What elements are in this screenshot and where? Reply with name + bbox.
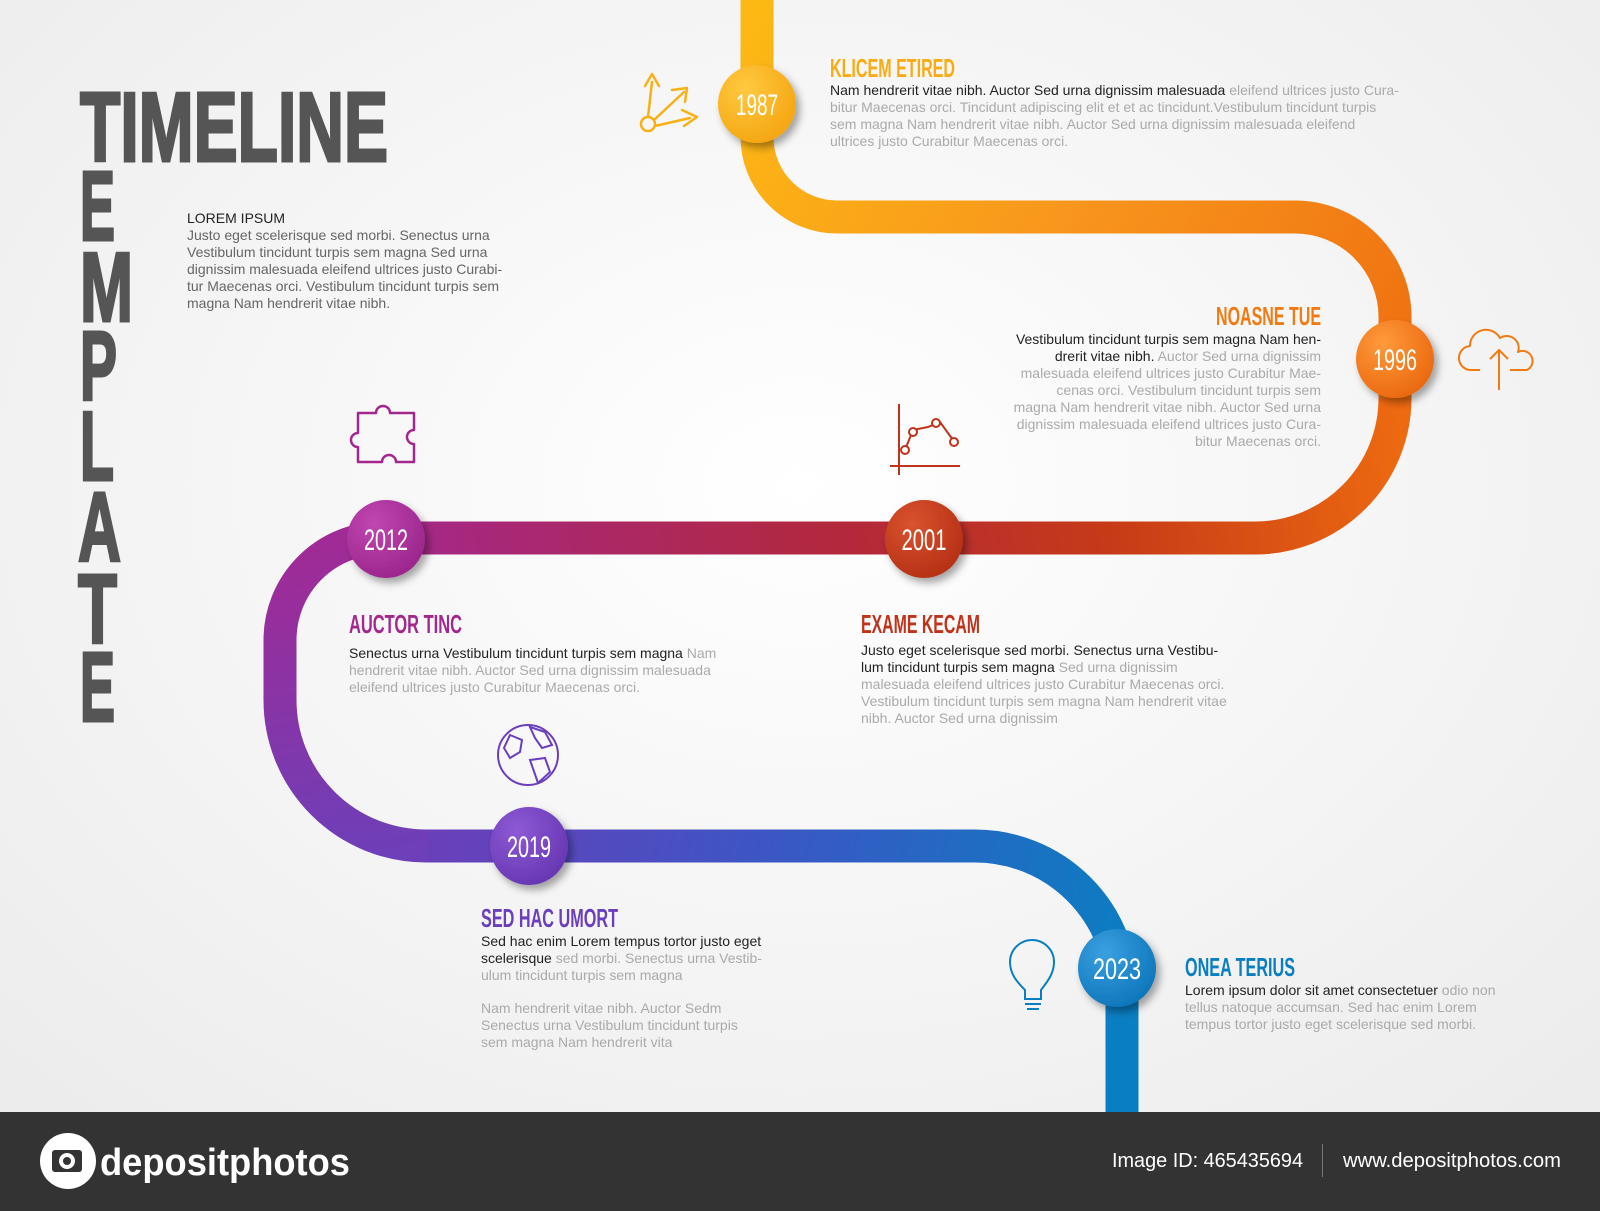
timeline path [280, 0, 1395, 1112]
logo [40, 1133, 350, 1189]
milestone 1996 text: magna Nam hendrerit vitae nibh. Auctor Sed urna [1014, 399, 1321, 415]
milestone 1987 text: Nam hendrerit vitae nibh. Auctor Sed urna dignissim malesuada eleifend ultrices justo Cura- [830, 82, 1399, 98]
icon: puzzle [351, 406, 414, 462]
intro text: Justo eget scelerisque sed morbi. Senectus urna [187, 227, 490, 243]
milestone 2023 text: Lorem ipsum dolor sit amet consectetuer odio non [1185, 982, 1496, 998]
milestone 2012 text: eleifend ultrices justo Curabitur Maecenas orci. [349, 679, 640, 695]
year labels: 2001 [902, 524, 946, 557]
footer info: www.depositphotos.com [1342, 1150, 1561, 1172]
icon: light bulb [1010, 940, 1054, 1009]
milestone 2019 text [481, 903, 762, 1050]
intro text: tur Maecenas orci. Vestibulum tincidunt turpis sem [187, 278, 499, 294]
milestone 1996 text [1014, 301, 1321, 449]
milestone 2001 text: Vestibulum tincidunt turpis sem magna Nam hendrerit vitae [861, 693, 1227, 709]
year labels: 1987 [736, 89, 778, 122]
milestone 1996 text: cenas orci. Vestibulum tincidunt turpis sem [1056, 382, 1321, 398]
footer info: Image ID: 465435694 [1112, 1150, 1303, 1172]
milestone 1987 text: bitur Maecenas orci. Tincidunt adipiscing elit et et ac tincidunt.Vestibulum tincidunt turpis [830, 99, 1376, 115]
milestone 2019 text: ulum tincidunt turpis sem magna [481, 967, 683, 983]
milestone 2023 text: ONEA TERIUS [1185, 952, 1295, 982]
title [78, 72, 388, 742]
milestone 1987 text [830, 53, 1399, 149]
intro text: dignissim malesuada eleifend ultrices justo Curabi- [187, 261, 502, 277]
milestone 2019 text: sem magna Nam hendrerit vita [481, 1034, 673, 1050]
milestone 1987 text: sem magna Nam hendrerit vitae nibh. Auctor Sed urna dignissim malesuada eleifend [830, 116, 1355, 132]
milestone 2012 text: AUCTOR TINC [349, 609, 462, 639]
title: E [80, 151, 115, 261]
icon: cloud upload [1459, 330, 1533, 390]
intro text: LOREM IPSUM [187, 210, 285, 226]
milestone 2001 text [861, 609, 1227, 726]
milestone 1996 text: dignissim malesuada eleifend ultrices justo Cura- [1017, 416, 1321, 432]
milestone 2001 text: malesuada eleifend ultrices justo Curabitur Maecenas orci. [861, 676, 1224, 692]
title: A [78, 472, 121, 582]
footer info [1112, 1144, 1561, 1177]
milestone 1987 text: ultrices justo Curabitur Maecenas orci. [830, 133, 1068, 149]
milestone 2023 text: tellus natoque accumsan. Sed hac enim Lorem [1185, 999, 1477, 1015]
milestone 1996 text: drerit vitae nibh. Auctor Sed urna dignissim [1055, 348, 1321, 364]
milestone 1996 text: Vestibulum tincidunt turpis sem magna Nam hen- [1016, 331, 1321, 347]
milestone 1987 text: KLICEM ETIRED [830, 53, 955, 83]
intro text: magna Nam hendrerit vitae nibh. [187, 295, 390, 311]
year labels [364, 89, 1417, 986]
milestone 2019 text: Nam hendrerit vitae nibh. Auctor Sedm [481, 1000, 721, 1016]
year markers [347, 65, 1434, 1007]
milestone 2019 text: Sed hac enim Lorem tempus tortor justo eget [481, 933, 761, 949]
milestone 2012 text: hendrerit vitae nibh. Auctor Sed urna dignissim malesuada [349, 662, 711, 678]
milestone 2012 text: Senectus urna Vestibulum tincidunt turpis sem magna Nam [349, 645, 716, 661]
year labels: 1996 [1373, 344, 1417, 377]
year labels: 2012 [364, 524, 408, 557]
milestone 1996 text: malesuada eleifend ultrices justo Curabitur Mae- [1021, 365, 1321, 381]
title: TIMELINE [80, 72, 388, 182]
milestone 2001 text: EXAME KECAM [861, 609, 980, 639]
milestone 2001 text: Justo eget scelerisque sed morbi. Senectus urna Vestibu- [861, 642, 1219, 658]
milestone 2023 text: tempus tortor justo eget scelerisque sed morbi. [1185, 1016, 1476, 1032]
intro text: Vestibulum tincidunt turpis sem magna Sed urna [187, 244, 488, 260]
year labels: 2023 [1093, 953, 1141, 986]
footer [0, 1112, 1600, 1211]
icon: arrows [641, 74, 697, 131]
title: P [80, 311, 117, 421]
milestone 2001 text: nibh. Auctor Sed urna dignissim [861, 710, 1058, 726]
title: E [80, 632, 115, 742]
milestone 1996 text: NOASNE TUE [1216, 301, 1321, 331]
title: M [80, 232, 133, 342]
intro text [187, 210, 502, 311]
title: L [80, 391, 114, 501]
title: T [78, 554, 117, 664]
icon: chart [890, 404, 960, 475]
milestone 1996 text: bitur Maecenas orci. [1195, 433, 1321, 449]
logo: depositphotos [100, 1142, 350, 1184]
milestone 2001 text: lum tincidunt turpis sem magna Sed urna dignissim [861, 659, 1178, 675]
year labels: 2019 [507, 831, 551, 864]
milestone 2012 text [349, 609, 716, 695]
milestone 2019 text: scelerisque sed morbi. Senectus urna Vestib- [481, 950, 762, 966]
milestone 2019 text: SED HAC UMORT [481, 903, 618, 933]
milestone 2019 text: Senectus urna Vestibulum tincidunt turpis [481, 1017, 738, 1033]
milestone 2023 text [1185, 952, 1496, 1032]
icon: globe [498, 725, 558, 785]
